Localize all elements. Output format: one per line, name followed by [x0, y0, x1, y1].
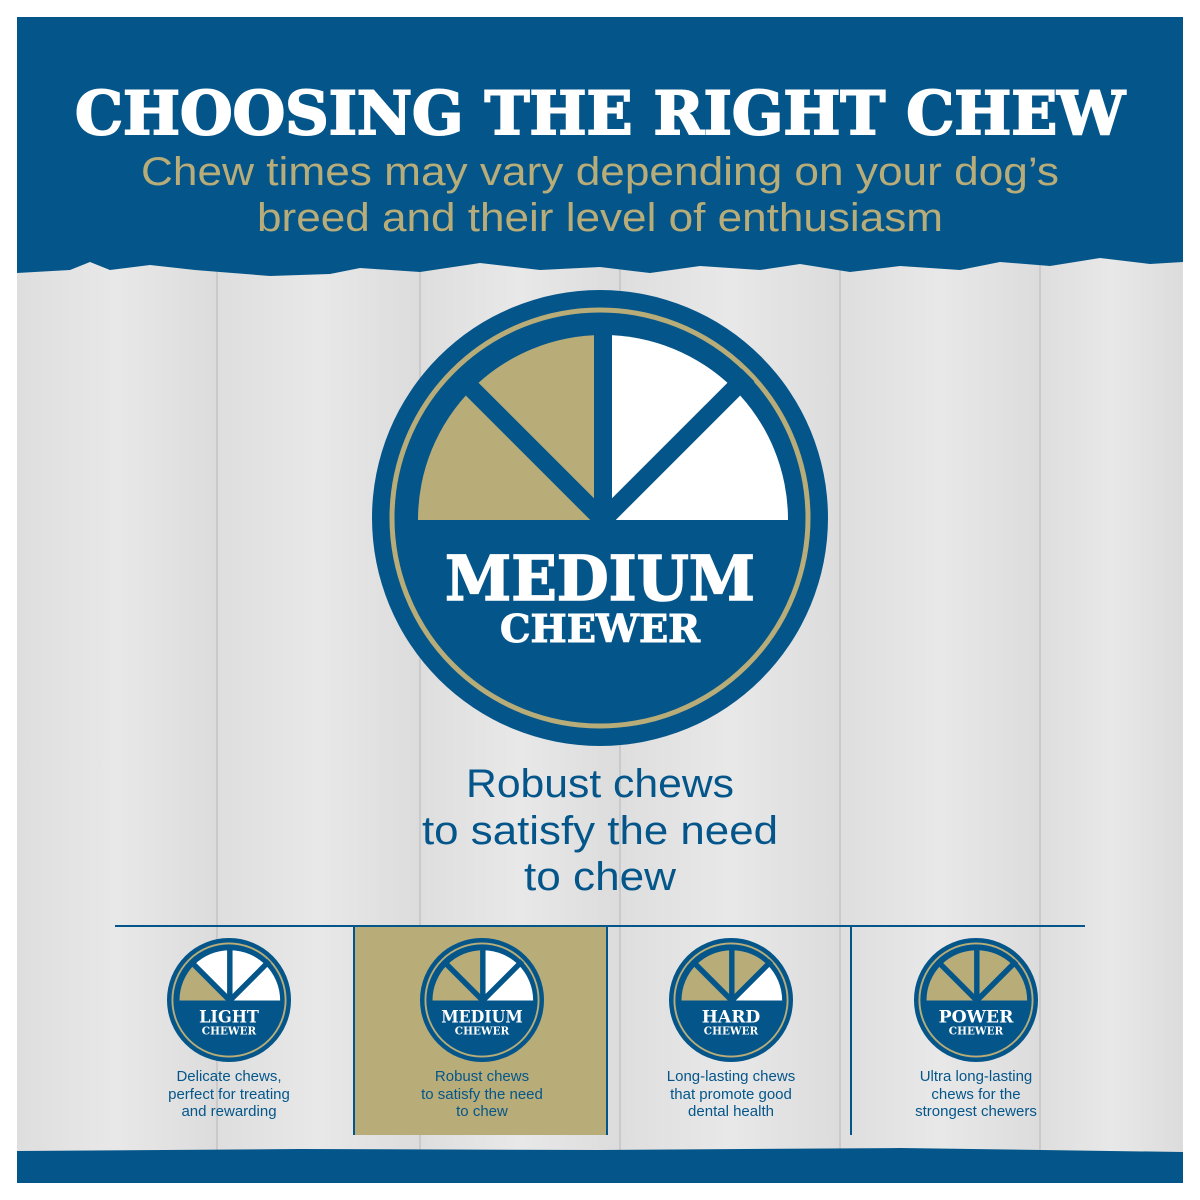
badge: hard — [669, 938, 793, 1062]
text: hard: Long-lasting chews — [667, 1068, 795, 1085]
text: medium: to chew — [456, 1103, 508, 1120]
badge: hard: CHEWER — [704, 1023, 759, 1037]
badge: medium — [420, 938, 544, 1062]
badge: power: CHEWER — [949, 1023, 1004, 1037]
text: hard: dental health — [688, 1103, 774, 1120]
text: light: perfect for treating — [168, 1086, 290, 1103]
main description: to satisfy the need — [422, 809, 778, 853]
main badge: medium chewer — [372, 290, 828, 746]
badge: light — [167, 938, 291, 1062]
text: medium: to satisfy the need — [421, 1086, 543, 1103]
text: power: Ultra long-lasting — [920, 1068, 1032, 1085]
badge: medium: MEDIUM — [441, 1006, 523, 1026]
title: CHOOSING THE RIGHT CHEW — [75, 79, 1127, 149]
text: light: Delicate chews, — [176, 1068, 282, 1085]
text: power: chews for the — [931, 1086, 1021, 1103]
main description: to chew — [524, 855, 676, 899]
badge: light: LIGHT — [199, 1006, 259, 1026]
badge: power — [914, 938, 1038, 1062]
badge: hard: HARD — [702, 1006, 760, 1026]
comparison strip — [115, 926, 1085, 1135]
header banner — [17, 17, 1183, 276]
text: hard: that promote good — [670, 1086, 792, 1103]
text: light: and rewarding — [181, 1103, 277, 1120]
badge: power: POWER — [939, 1006, 1014, 1026]
main badge: medium chewer: CHEWER — [500, 606, 700, 651]
text: power: strongest chewers — [915, 1103, 1037, 1120]
text: medium: Robust chews — [435, 1068, 529, 1085]
footer bar — [17, 1148, 1183, 1183]
badge: light: CHEWER — [202, 1023, 257, 1037]
main description: Robust chews — [466, 762, 734, 806]
badge label: MEDIUM — [445, 542, 755, 615]
badge: medium: CHEWER — [455, 1023, 510, 1037]
subtitle: breed and their level of enthusiasm — [257, 196, 943, 240]
subtitle: Chew times may vary depending on your dog’s — [141, 150, 1059, 194]
